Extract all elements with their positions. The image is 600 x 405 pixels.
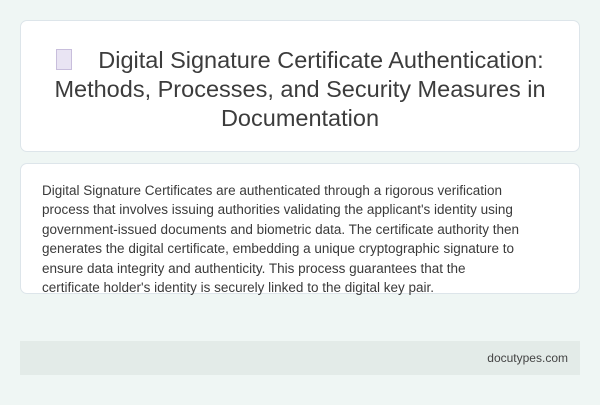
text block <box>42 183 519 295</box>
text block: Digital Signature Certificates are authenticated through a rigorous verification <box>42 183 502 198</box>
panel: description <box>20 163 580 294</box>
text block: certificate holder's identity is securely linked to the digital key pair. <box>42 280 434 295</box>
text block: process that involves issuing authorities validating the applicant's identity using <box>42 202 513 217</box>
text block: government-issued documents and biometric data. The certificate authority then <box>42 222 519 237</box>
text block: generates the digital certificate, embedding a unique cryptographic signature to <box>42 241 514 256</box>
icon: document <box>56 49 72 70</box>
title: Digital Signature Certificate Authentication: Methods, Processes, and Security Measures in Documentation <box>54 47 546 131</box>
footer text: docutypes.com <box>487 351 568 365</box>
text block: ensure data integrity and authenticity. This process guarantees that the <box>42 261 466 276</box>
footer <box>20 341 580 375</box>
panel: title <box>20 20 580 152</box>
